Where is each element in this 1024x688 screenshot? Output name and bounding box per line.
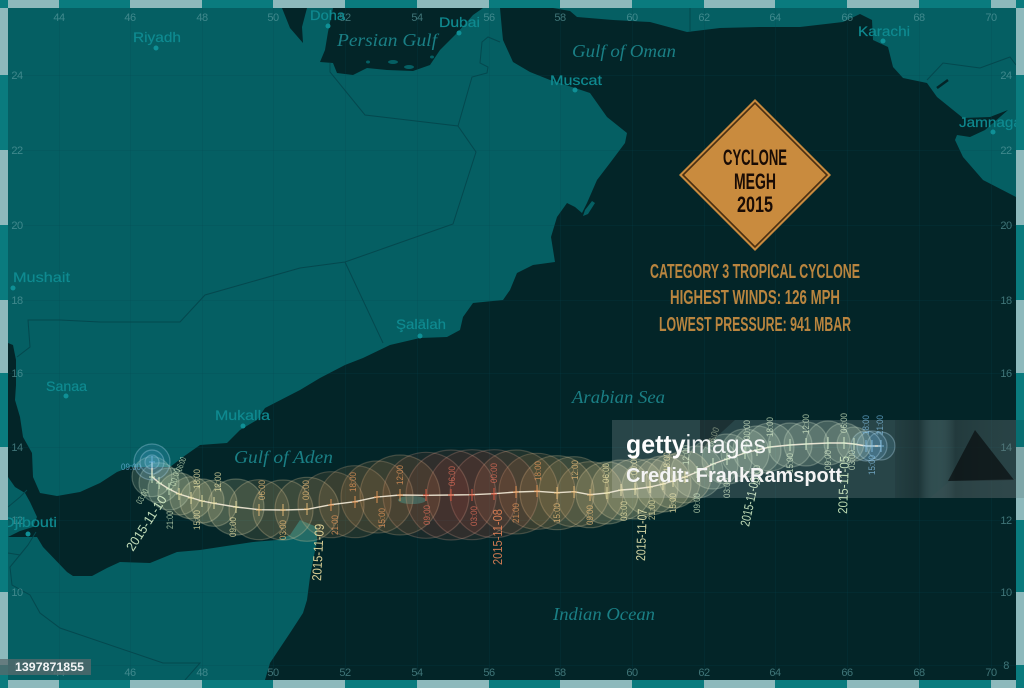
wind radius circles along track (132, 421, 895, 541)
cyclone track line (152, 443, 881, 510)
grid labels: 12 (1000, 515, 1012, 527)
city labels: Riyadh (133, 29, 181, 45)
city labels: Dubai (439, 14, 480, 30)
grid labels: 24 (11, 70, 23, 82)
date labels: 2015-11-10 (123, 493, 170, 554)
grid labels: 10 (1000, 587, 1012, 599)
grid labels: 46 (124, 667, 136, 679)
sea labels: Persian Gulf (336, 30, 440, 50)
grid labels: 18 (1000, 295, 1012, 307)
grid labels: 10 (11, 587, 23, 599)
grid labels: 70 (985, 12, 997, 24)
track time labels: 18:00 (348, 472, 358, 492)
grid labels: 62 (698, 12, 710, 24)
track time labels: 06:00 (174, 456, 188, 472)
sea labels: Arabian Sea (571, 387, 665, 407)
image ID tag (0, 659, 91, 675)
image ID tag: 1397871855 (15, 662, 85, 674)
cyclone statistics text: CATEGORY 3 TROPICAL CYCLONE (650, 261, 860, 283)
warning sign: Cyclone Megh 2015: CYCLONE (723, 145, 787, 170)
grid labels: 68 (913, 667, 925, 679)
cyclone statistics text: HIGHEST WINDS: 126 MPH (670, 287, 840, 309)
track time labels: 15:00 (192, 510, 202, 530)
sea labels: Gulf of Oman (572, 41, 676, 61)
grid labels: 48 (196, 12, 208, 24)
track time labels: 21:00 (330, 515, 340, 535)
cyclone statistics text (650, 261, 860, 336)
track time labels: 21:00 (752, 465, 762, 485)
track time labels: 03:00 (619, 501, 629, 521)
track time labels: 06:00 (839, 413, 849, 433)
cyclone statistics text: LOWEST PRESSURE: 941 MBAR (659, 314, 851, 336)
track time labels: 06:00 (257, 480, 267, 500)
date labels: 2015-11-05 (835, 456, 852, 514)
grid labels: 16 (1000, 368, 1012, 380)
warning sign: Cyclone Megh 2015: MEGH (734, 169, 776, 194)
track time labels: 09:00 (585, 505, 595, 525)
grid labels: 18 (11, 295, 23, 307)
city labels: Mushait (13, 269, 70, 285)
grid labels: 56 (483, 12, 495, 24)
grid labels: 58 (554, 12, 566, 24)
grid labels: 48 (196, 667, 208, 679)
track time labels: 09:00 (692, 493, 702, 513)
track time labels: 12:00 (213, 472, 223, 492)
grid labels: 22 (1000, 145, 1012, 157)
track time labels: 21:00 (511, 503, 521, 523)
track time labels: 12:00 (681, 445, 691, 465)
grid labels: 52 (339, 667, 351, 679)
track time labels: 00:00 (629, 455, 639, 475)
track time labels: 15:00 (785, 453, 795, 473)
grid labels: 20 (11, 220, 23, 232)
city labels: Muscat (550, 72, 602, 88)
date labels (123, 456, 852, 581)
track time labels: 15:00 (668, 493, 678, 513)
grid labels: 44 (53, 12, 65, 24)
track time labels: 06:00 (447, 466, 457, 486)
grid labels: 70 (985, 667, 997, 679)
track time labels: 03:00 (469, 506, 479, 526)
grid labels: 16 (11, 368, 23, 380)
track time labels: 18:00 (861, 415, 871, 435)
track time labels: 00:00 (301, 480, 311, 500)
grid labels: 54 (411, 667, 423, 679)
track time labels: 15:00 (377, 508, 387, 528)
grid labels: 66 (841, 12, 853, 24)
track time labels: 18:00 (765, 417, 775, 437)
city labels: Jamnagar (959, 114, 1024, 130)
track time labels: 12:00 (570, 460, 580, 480)
track time labels: 03:00 (134, 487, 151, 506)
grid labels: 14 (1000, 442, 1012, 454)
track time labels: 21:00 (165, 511, 175, 529)
track time labels: 09:00 (422, 505, 432, 525)
city labels (3, 7, 1024, 536)
date labels: 2015-11-06 (737, 476, 762, 528)
grid labels: 66 (841, 667, 853, 679)
track time labels (121, 413, 885, 540)
grid labels: 60 (626, 12, 638, 24)
track time labels: 00:00 (742, 420, 752, 440)
track time labels: 18:00 (533, 461, 543, 481)
islands (366, 56, 595, 504)
grid labels: 64 (769, 667, 781, 679)
city labels: Karachi (858, 23, 910, 39)
city labels: Doha (310, 7, 345, 23)
track time labels: 18:00 (192, 469, 202, 489)
city labels: Sanaa (46, 378, 87, 394)
grid labels: 52 (339, 12, 351, 24)
date labels: 2015-11-08 (490, 509, 505, 565)
track time labels: 09:00 (823, 450, 833, 470)
city labels: Şalālah (396, 316, 446, 332)
grid labels: 50 (267, 667, 279, 679)
track time labels: 12:00 (801, 414, 811, 434)
sea: Persian Gulf (282, 8, 483, 75)
grid labels: 60 (626, 667, 638, 679)
watermark band: gettyimages (626, 429, 766, 459)
track time labels: 06:00 (705, 426, 721, 448)
city labels: Mukalla (215, 407, 270, 423)
track time labels: 09:00 (228, 517, 238, 537)
track time labels: 00:00 (489, 463, 499, 483)
track time labels: 21:00 (647, 500, 657, 520)
track time labels: 21:00 (875, 415, 885, 435)
grid labels: 14 (11, 442, 23, 454)
track tick marks (149, 437, 884, 516)
warning sign: Cyclone Megh 2015 (679, 99, 831, 251)
grid labels: 12 (11, 515, 23, 527)
grid labels: 64 (769, 12, 781, 24)
sea labels: Indian Ocean (552, 604, 655, 624)
city labels: Djibouti (3, 514, 57, 530)
grid labels: 46 (124, 12, 136, 24)
grid labels: 44 (53, 667, 65, 679)
track time labels: 00:00 (168, 467, 182, 487)
track time labels: 15:00 (867, 455, 877, 475)
sea labels (234, 30, 676, 624)
track time labels: 03:00 (278, 520, 288, 540)
grid labels: 24 (1000, 70, 1012, 82)
warning sign: Cyclone Megh 2015: 2015 (737, 192, 773, 217)
track time labels: 03:00 (722, 478, 732, 498)
grid labels: 50 (267, 12, 279, 24)
track time labels: 06:00 (601, 463, 611, 483)
grid labels: 22 (11, 145, 23, 157)
grid labels: 56 (483, 667, 495, 679)
grid labels: 8 (14, 660, 20, 672)
track time labels: 03:00 (847, 450, 857, 470)
track time labels: 18:00 (662, 452, 672, 472)
watermark band: Credit: FrankRamspott (626, 465, 842, 487)
grid labels: 68 (913, 12, 925, 24)
track time labels: 09:00 (121, 462, 141, 472)
date labels: 2015-11-09 (309, 523, 327, 581)
grid labels: 8 (1003, 660, 1009, 672)
grid labels: 54 (411, 12, 423, 24)
date labels: 2015-11-07 (633, 509, 650, 561)
grid labels: 62 (698, 667, 710, 679)
watermark band (612, 420, 1024, 498)
track time labels: 15:00 (552, 503, 562, 523)
grid labels: 58 (554, 667, 566, 679)
track time labels: 12:00 (395, 465, 405, 485)
sea labels: Gulf of Aden (234, 447, 333, 467)
grid labels: 20 (1000, 220, 1012, 232)
